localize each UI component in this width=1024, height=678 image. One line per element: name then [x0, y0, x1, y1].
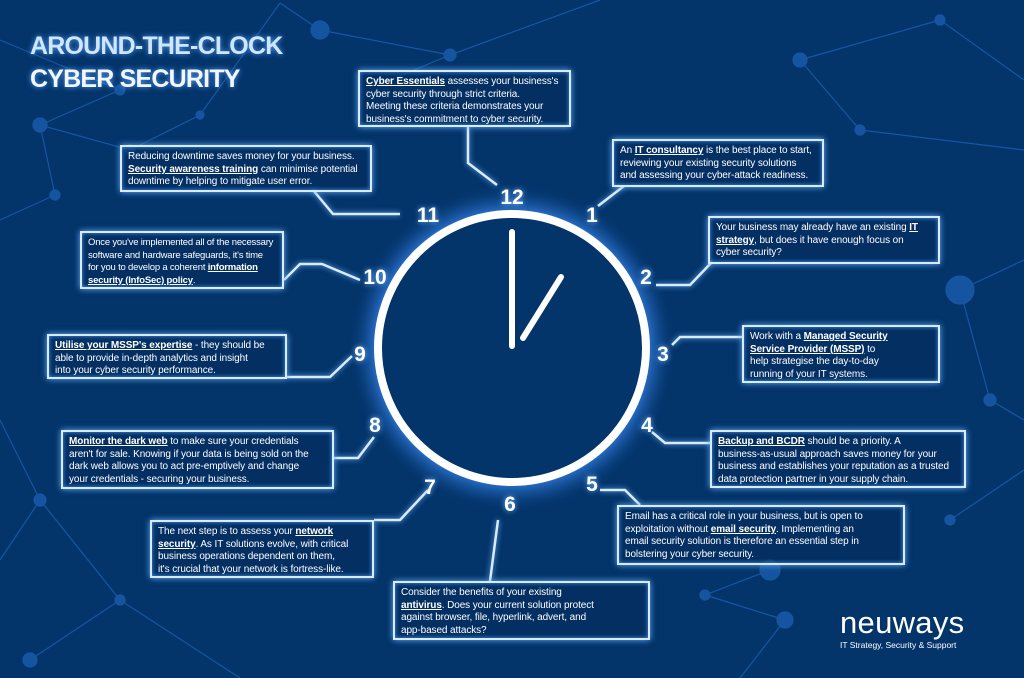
- box 4: business-as-usual approach saves money for your: [718, 449, 937, 460]
- box 10: Once you've implemented all of the necessary: [88, 237, 273, 248]
- box 3: running of your IT systems.: [750, 369, 868, 380]
- box 2: cyber security?: [716, 247, 782, 258]
- box 11: [120, 145, 372, 192]
- box 12: business's commitment to cyber security.: [366, 114, 543, 125]
- box 8: your credentials - securing your business.: [69, 474, 249, 485]
- box 7: it's crucial that your network is fortress-like.: [158, 564, 344, 575]
- box 6: [393, 581, 650, 640]
- box 5: [617, 505, 905, 565]
- box 9: able to provide in-depth analytics and insight: [55, 353, 248, 364]
- box 7: [150, 520, 374, 578]
- box 7: security. As IT solutions evolve, with critical: [158, 539, 348, 550]
- box 6: Consider the benefits of your existing: [401, 587, 562, 598]
- clock numbers: 12: [500, 186, 524, 209]
- box 11: Reducing downtime saves money for your business.: [128, 151, 354, 162]
- box 1: and assessing your cyber-attack readiness.: [620, 170, 808, 181]
- box 9: into your cyber security performance.: [55, 365, 216, 376]
- box 2: [708, 216, 940, 264]
- box 8: [61, 430, 334, 489]
- box 4: [710, 430, 966, 488]
- box 5: exploitation without email security. Implementing an: [625, 524, 854, 535]
- box 7: business operations dependent on them,: [158, 551, 335, 562]
- box 12: cyber security through strict criteria.: [366, 89, 520, 100]
- box 7: The next step is to assess your network: [158, 526, 333, 537]
- clock numbers: 2: [640, 266, 652, 289]
- box 12: Cyber Essentials assesses your business's: [366, 76, 558, 87]
- title: AROUND-THE-CLOCK: [30, 32, 282, 60]
- box 4: data protection partner in your supply chain.: [718, 474, 908, 485]
- box 5: bolstering your cyber security.: [625, 549, 754, 560]
- box 12: [358, 70, 571, 127]
- clock numbers: 11: [417, 204, 439, 227]
- box 9: [47, 334, 287, 379]
- box 10: for you to develop a coherent information: [88, 262, 258, 273]
- clock numbers: 1: [586, 204, 598, 227]
- box 5: email security solution is therefore an essential step in: [625, 536, 859, 547]
- box 4: Backup and BCDR should be a priority. A: [718, 436, 901, 447]
- title: CYBER SECURITY: [30, 65, 240, 93]
- logo: neuways: [840, 605, 964, 640]
- clock numbers: 6: [504, 493, 516, 516]
- clock numbers: 8: [369, 414, 381, 437]
- box 5: Email has a critical role in your business, but is open to: [625, 511, 863, 522]
- box 12: Meeting these criteria demonstrates your: [366, 101, 543, 112]
- box 9: Utilise your MSSP's expertise - they should be: [55, 340, 265, 351]
- box 2: Your business may already have an existing IT: [716, 222, 918, 233]
- box 11: downtime by helping to mitigate user error.: [128, 176, 312, 187]
- box 8: Monitor the dark web to make sure your credentials: [69, 436, 299, 447]
- box 10: software and hardware safeguards, it's time: [88, 250, 263, 261]
- clock face: [347, 183, 677, 513]
- box 6: antivirus. Does your current solution protect: [401, 600, 594, 611]
- box 1: [612, 139, 824, 187]
- box 3: [742, 325, 940, 383]
- box 1: reviewing your existing security solutions: [620, 158, 796, 169]
- box 4: business and establishes your reputation as a trusted: [718, 461, 949, 472]
- clock numbers: 3: [657, 343, 669, 366]
- logo: IT Strategy, Security & Support: [840, 640, 956, 650]
- clock numbers: 9: [354, 343, 366, 366]
- box 10: [80, 231, 284, 289]
- box 1: An IT consultancy is the best place to start,: [620, 145, 812, 156]
- connectors: [284, 127, 742, 581]
- box 3: help strategise the day-to-day: [750, 356, 879, 367]
- box 11: Security awareness training can minimise potential: [128, 164, 358, 175]
- box 10: security (InfoSec) policy.: [88, 275, 195, 286]
- clock numbers: 4: [641, 414, 653, 437]
- box 6: against browser, file, hyperlink, advert, and: [401, 612, 586, 623]
- box 3: Work with a Managed Security: [750, 331, 888, 342]
- box 3: Service Provider (MSSP) to: [750, 344, 875, 355]
- clock numbers: [354, 186, 669, 516]
- box 6: app-based attacks?: [401, 625, 486, 636]
- title: [27, 32, 285, 93]
- clock numbers: 10: [363, 266, 387, 289]
- clock numbers: 5: [586, 473, 598, 496]
- box 2: strategy, but does it have enough focus on: [716, 235, 904, 246]
- box 8: aren't for sale. Knowing if your data is being sold on the: [69, 449, 309, 460]
- clock numbers: 7: [424, 476, 436, 499]
- box 8: dark web allows you to act pre-emptively and change: [69, 461, 299, 472]
